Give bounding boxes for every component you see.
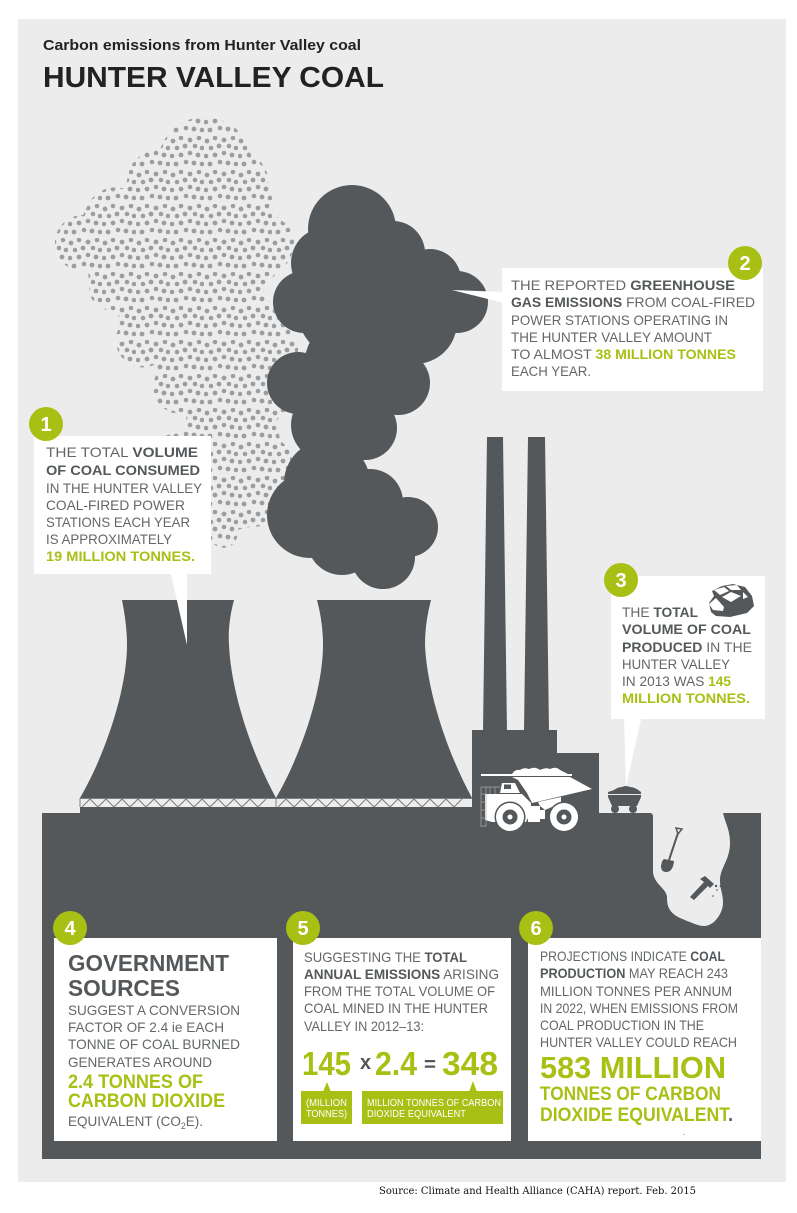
equation: 2.4 [375, 1045, 418, 1082]
callout text: HUNTER VALLEY [622, 656, 731, 672]
body text: COAL PRODUCTION IN THE [540, 1017, 704, 1033]
callout text: GAS EMISSIONS FROM COAL-FIRED [511, 294, 755, 310]
callout text: VOLUME OF COAL [622, 621, 751, 637]
number badge [29, 407, 63, 441]
chimney left [483, 437, 507, 732]
callout box [611, 576, 765, 719]
callout text: THE REPORTED GREENHOUSE [511, 277, 735, 293]
body text: SUGGESTING THE TOTAL [304, 949, 467, 965]
callout text [46, 444, 203, 564]
cooling tower left [80, 600, 276, 798]
body text: ANNUAL EMISSIONS ARISING [304, 966, 499, 982]
panel 5: total annual emissions [286, 911, 511, 1141]
equivalent note: E). [186, 1113, 203, 1129]
callout text: IN 2013 WAS 145 [622, 673, 731, 689]
highlighted figure: TONNES OF CARBON [540, 1084, 721, 1105]
panel 6: projections [519, 911, 761, 1141]
body text: FACTOR OF 2.4 ie EACH [68, 1019, 224, 1035]
body text: COAL MINED IN THE HUNTER [304, 1000, 488, 1016]
label: million tonnes of carbon dioxide equivalent: DIOXIDE EQUIVALENT [367, 1108, 467, 1120]
callout text: STATIONS EACH YEAR [46, 514, 190, 530]
callout text: IS APPROXIMATELY [46, 531, 173, 547]
callout text: THE TOTAL [622, 604, 698, 620]
callout text [511, 277, 755, 379]
ground with power station and mine pit [42, 730, 761, 1159]
icon: shovel [661, 828, 682, 872]
number badge: 2 [739, 253, 751, 275]
number badge: 5 [297, 918, 309, 940]
panel box [528, 938, 761, 1141]
equation [302, 1045, 498, 1082]
panel box [54, 938, 277, 1141]
callout box [34, 436, 211, 574]
highlighted figure: 583 MILLION [540, 1050, 726, 1085]
body text: VALLEY IN 2012–13: [304, 1018, 424, 1034]
equation: = [424, 1054, 436, 1076]
panel box [293, 938, 511, 1141]
body text: IN 2022, WHEN EMISSIONS FROM [540, 1000, 738, 1016]
body text: FROM THE TOTAL VOLUME OF [304, 983, 495, 999]
number badge [286, 911, 320, 945]
heading [68, 950, 229, 1001]
icon: dump truck [481, 768, 592, 832]
callout text: IN THE HUNTER VALLEY [46, 480, 203, 496]
panel 4: government sources [53, 911, 277, 1141]
heading: GOVERNMENT [68, 950, 229, 976]
number badge: 1 [40, 414, 52, 436]
source line: Source: Climate and Health Alliance (CAHA) report. Feb. 2015 [379, 1185, 696, 1197]
callout text: OF COAL CONSUMED [46, 462, 200, 478]
body text: PROJECTIONS INDICATE COAL [540, 948, 725, 964]
number badge [604, 563, 638, 597]
icon: coal cart [608, 786, 641, 813]
callout text: COAL-FIRED POWER [46, 497, 185, 513]
highlighted figure: CARBON DIOXIDE [68, 1091, 225, 1112]
number badge [53, 911, 87, 945]
body text: HUNTER VALLEY COULD REACH [540, 1034, 737, 1050]
number badge: 6 [530, 918, 542, 940]
callout text: 19 MILLION TONNES. [46, 548, 195, 564]
body text: GENERATES AROUND [68, 1054, 212, 1070]
callout text: POWER STATIONS OPERATING IN [511, 312, 728, 328]
callout text: THE TOTAL VOLUME [46, 444, 198, 460]
heading: SOURCES [68, 975, 180, 1001]
lattice supports [80, 798, 472, 807]
label: million tonnes: (MILLION [306, 1097, 347, 1109]
number badge: 4 [64, 918, 76, 940]
body text: TONNE OF COAL BURNED [68, 1036, 240, 1052]
dark smoke cloud [267, 185, 488, 589]
icon: pickaxe [690, 876, 722, 900]
header [43, 37, 384, 94]
callout text: THE HUNTER VALLEY AMOUNT [511, 329, 712, 345]
equivalent note: 2 [181, 1121, 186, 1131]
callout 1 [29, 407, 211, 645]
body text [304, 949, 499, 1034]
label: million tonnes of carbon dioxide equivalent [362, 1081, 503, 1124]
body text [540, 948, 738, 1050]
highlighted figure [68, 1072, 225, 1112]
callout box [502, 268, 763, 391]
highlighted figure [540, 1050, 733, 1126]
callout pointer [452, 290, 504, 303]
number badge [728, 246, 762, 280]
number badge: 3 [615, 570, 627, 592]
equation: x [360, 1052, 371, 1074]
dotted smoke cloud [54, 118, 298, 548]
callout text: TO ALMOST 38 MILLION TONNES [511, 346, 736, 362]
equivalent note: EQUIVALENT (CO [68, 1113, 185, 1129]
callout 2 [452, 246, 763, 391]
callout text: MILLION TONNES. [622, 690, 750, 706]
highlighted figure: 2.4 TONNES OF [68, 1072, 203, 1093]
body text [68, 1002, 240, 1070]
label: million tonnes: TONNES) [306, 1108, 347, 1120]
icon: lump of coal [709, 584, 754, 617]
body text: PRODUCTION MAY REACH 243 [540, 965, 728, 981]
label: million tonnes [301, 1082, 352, 1124]
title: HUNTER VALLEY COAL [43, 62, 384, 94]
cooling tower right [276, 600, 472, 798]
body text: MILLION TONNES PER ANNUM [540, 983, 732, 999]
footnote mark: . [683, 1128, 685, 1137]
callout text: EACH YEAR. [511, 363, 591, 379]
callout text [622, 604, 752, 706]
body text: SUGGEST A CONVERSION [68, 1002, 240, 1018]
subtitle: Carbon emissions from Hunter Valley coal [43, 37, 361, 54]
highlighted figure: DIOXIDE EQUIVALENT. [540, 1105, 733, 1126]
callout pointer [170, 570, 187, 645]
equation: 145 [302, 1045, 351, 1082]
callout text: PRODUCED IN THE [622, 639, 752, 655]
callout 3 [604, 563, 765, 787]
equation: 348 [442, 1045, 498, 1082]
number badge [519, 911, 553, 945]
chimney right [524, 437, 549, 732]
callout pointer [624, 715, 642, 787]
label: million tonnes of carbon dioxide equivalent: MILLION TONNES OF CARBON [367, 1097, 501, 1109]
